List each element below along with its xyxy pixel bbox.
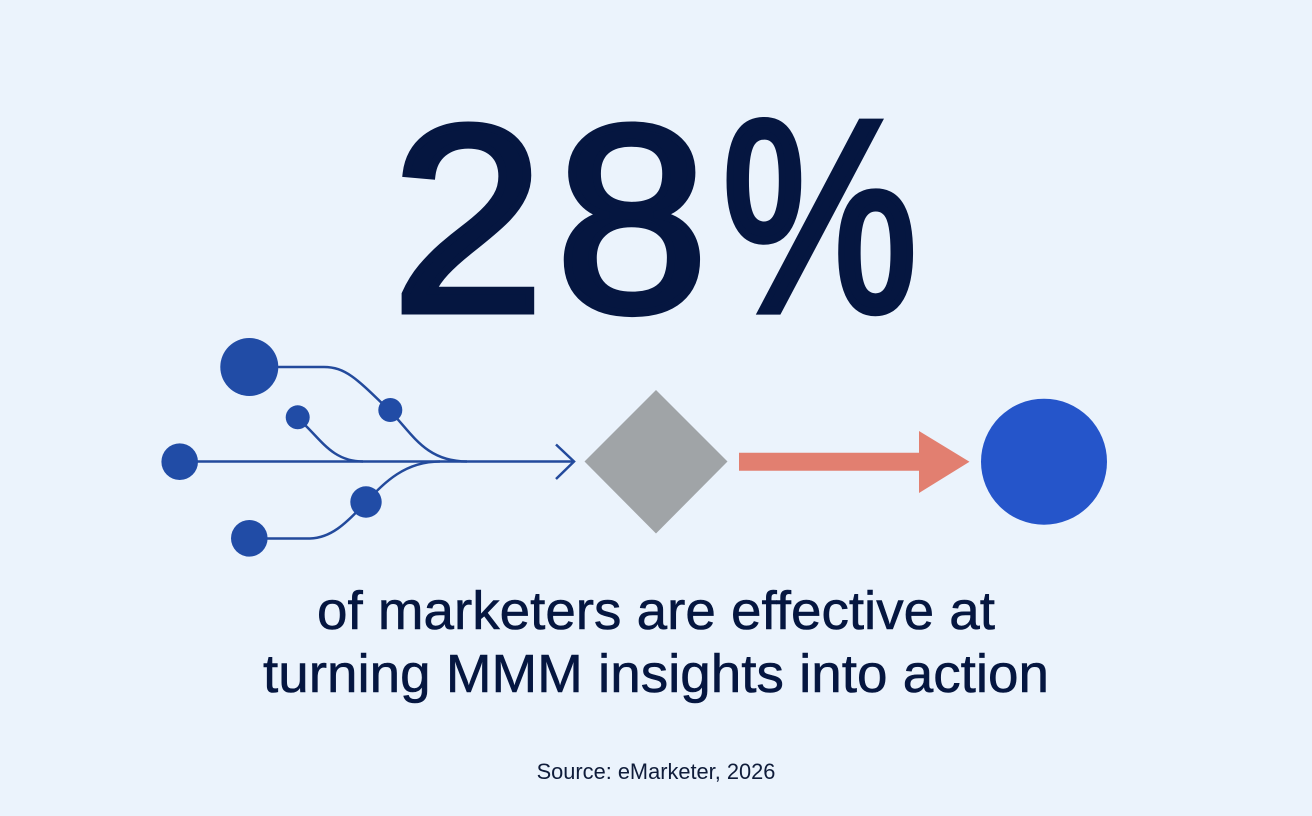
converging lines bbox=[180, 367, 573, 538]
description text bbox=[263, 581, 1049, 704]
description text: of marketers are effective at bbox=[317, 581, 995, 641]
headline stat: 28%: % bbox=[722, 64, 918, 369]
flow diagram bbox=[161, 338, 1107, 557]
headline stat: 28%: 2 bbox=[392, 71, 544, 368]
salmon arrow bbox=[739, 431, 970, 493]
outcome circle bbox=[981, 399, 1107, 525]
headline stat: 28%: 8 bbox=[556, 71, 708, 368]
decision diamond bbox=[584, 390, 728, 534]
headline stat: 28% bbox=[392, 64, 918, 369]
source nodes bbox=[161, 338, 402, 557]
arrowhead bbox=[556, 444, 574, 479]
description text: turning MMM insights into action bbox=[263, 644, 1049, 704]
source note: Source: eMarketer, 2026 bbox=[537, 759, 775, 784]
